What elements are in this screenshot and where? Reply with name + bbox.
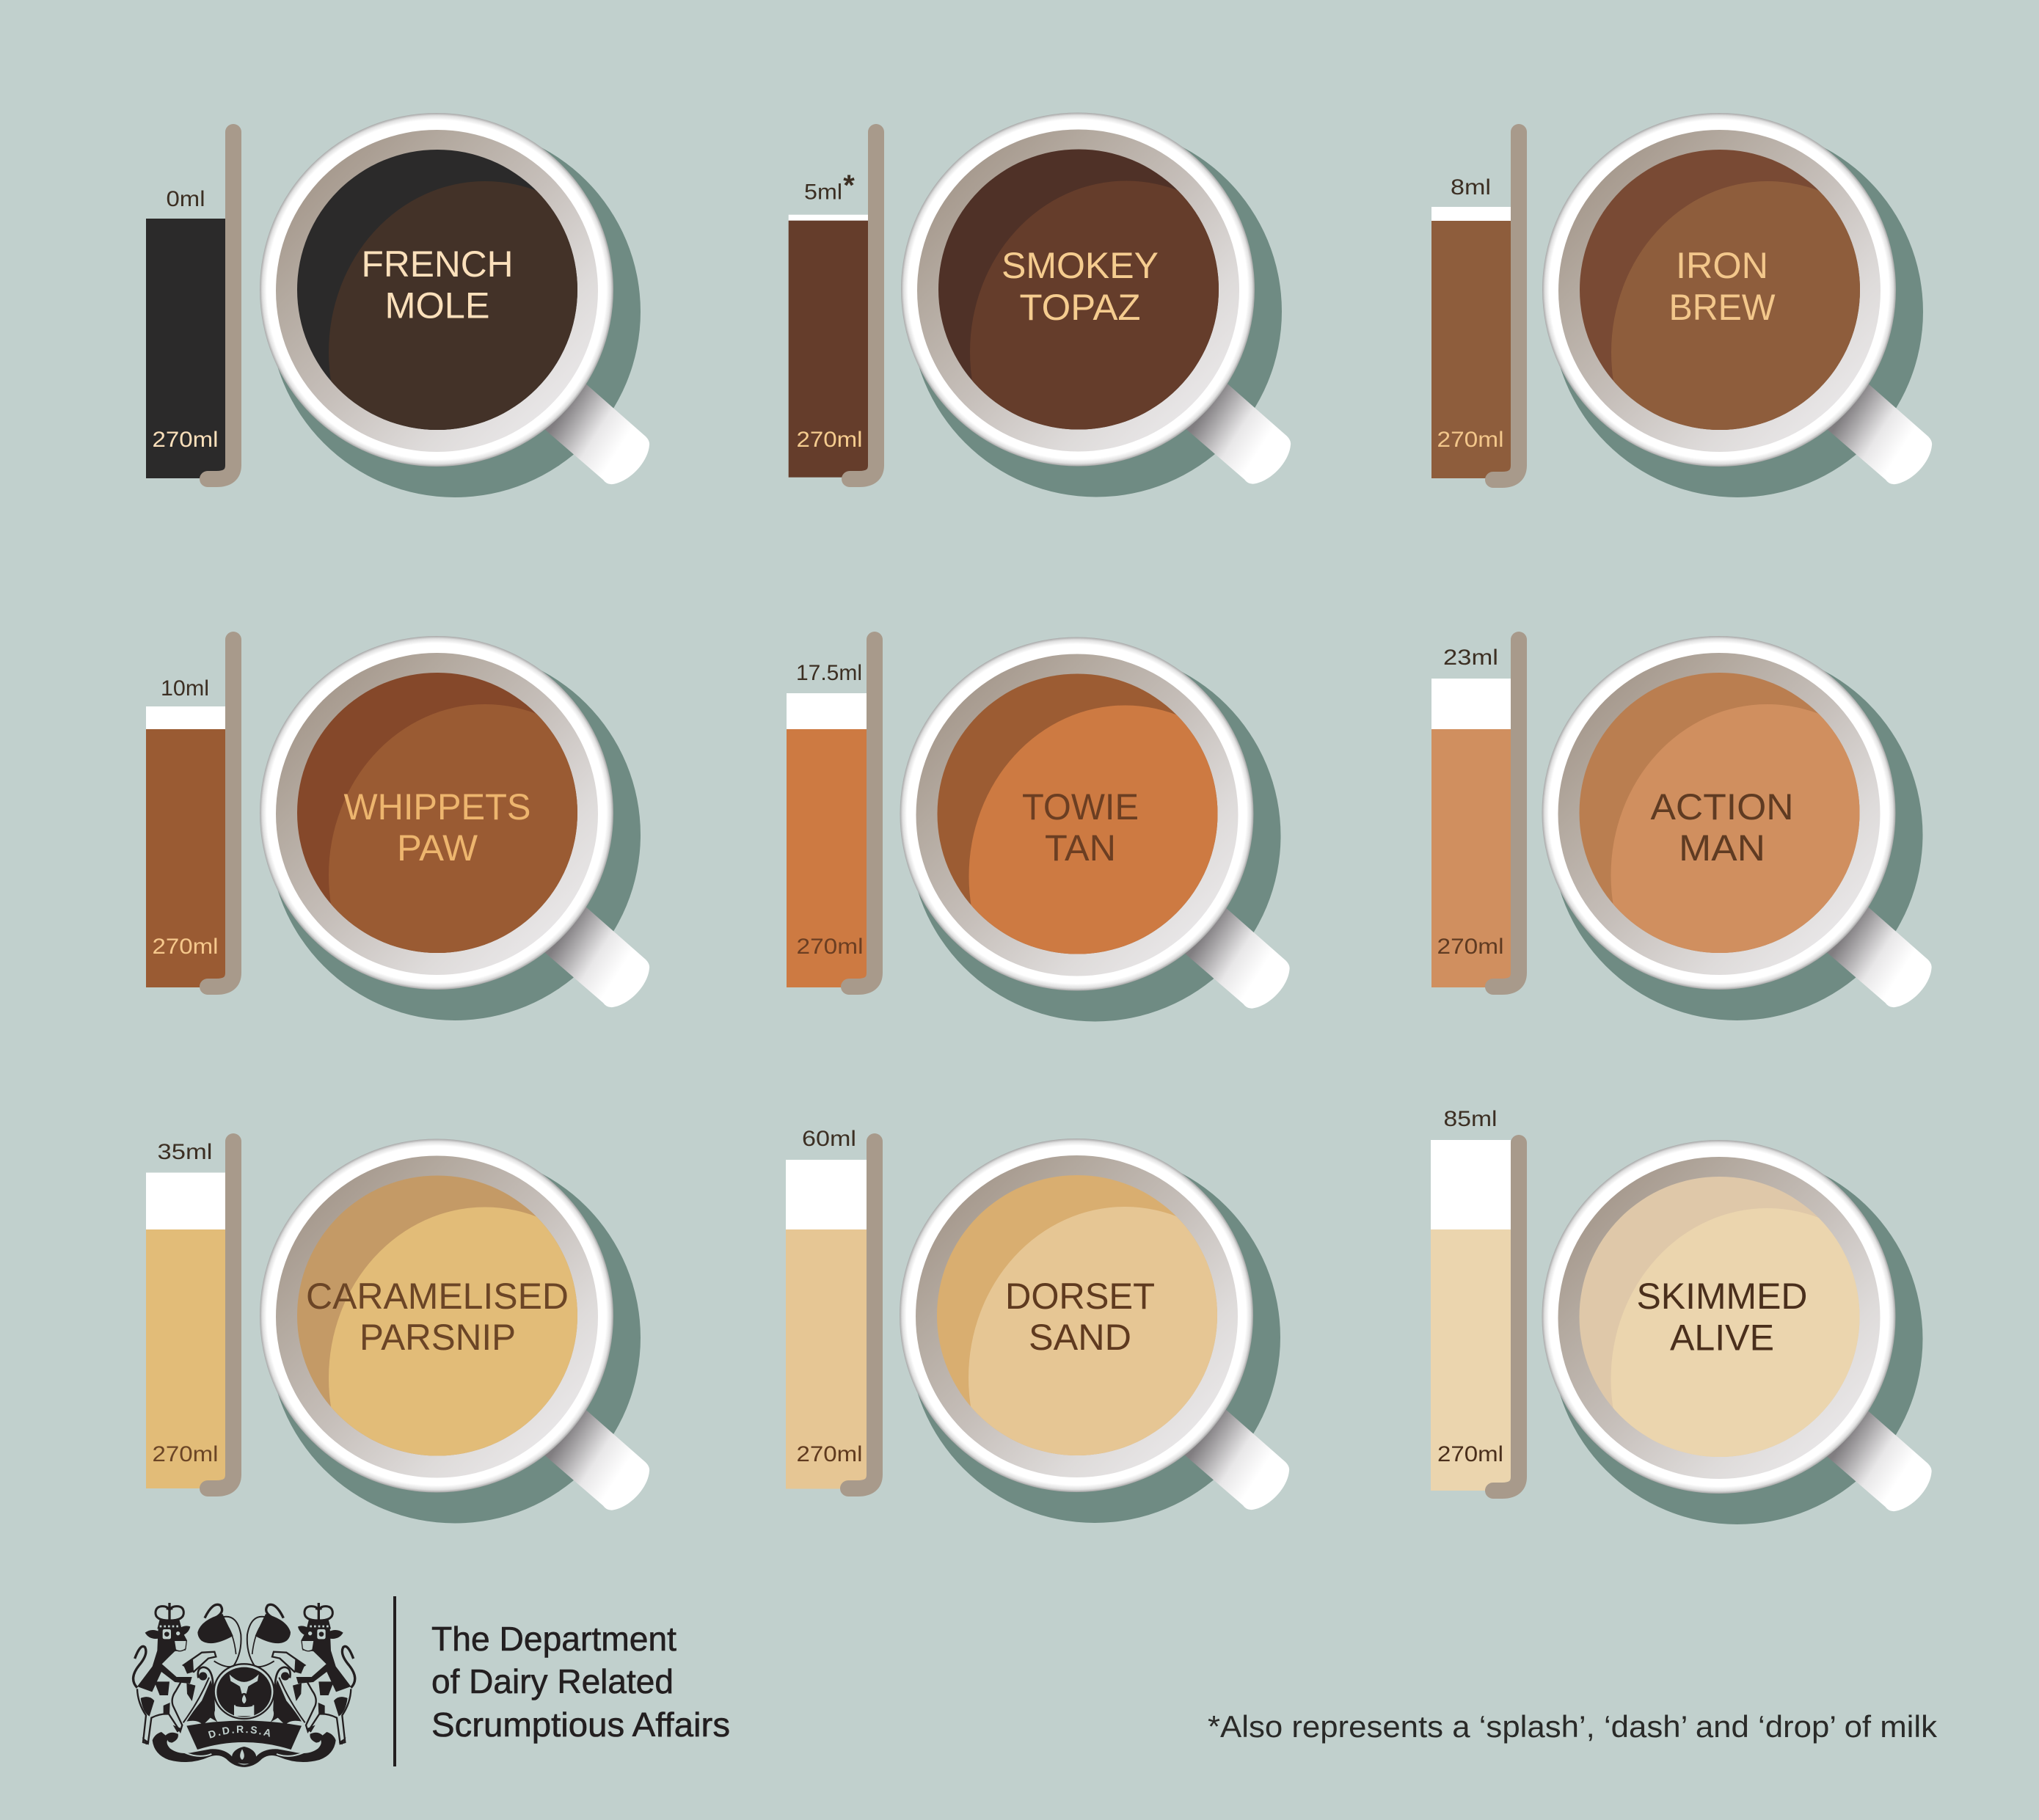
panel: Iron Brew (1431, 113, 1932, 523)
gauge: 10ml milk, 270ml coffee (146, 640, 233, 987)
cup label: CARAMELISED (306, 1276, 569, 1317)
gauge: 23ml milk, 270ml coffee (1431, 640, 1519, 987)
gauge: 8ml milk, 270ml coffee: 270ml (1437, 428, 1504, 452)
cup label (1668, 245, 1776, 328)
cup seen from above (1542, 636, 1932, 1046)
cup seen from above (1542, 113, 1932, 523)
central shield (216, 1667, 271, 1717)
cup label: TAN (1045, 827, 1116, 869)
gauge: 17.5ml milk, 270ml coffee: 270ml (797, 935, 863, 959)
panel: Dorset Sand (786, 1127, 1289, 1549)
gauge: 10ml milk, 270ml coffee: 10ml (161, 676, 209, 701)
cup seen from above (260, 1139, 649, 1549)
gauge: 8ml milk, 270ml coffee (1431, 132, 1519, 480)
logo: D.D.R.S.A crest (132, 1603, 357, 1767)
gauge: 5ml milk, 270ml coffee: 5ml (804, 180, 842, 205)
cup seen from above (900, 1139, 1289, 1549)
banner (186, 1720, 302, 1750)
gauge: 8ml milk, 270ml coffee: 8ml (1451, 175, 1491, 200)
panel: Whippets Paw (146, 636, 649, 1046)
gauge: 17.5ml milk, 270ml coffee (787, 640, 875, 987)
gauge: 60ml milk, 270ml coffee: 270ml (797, 1442, 863, 1466)
panel: Skimmed Alive (1431, 1107, 1932, 1550)
cup label: DORSET (1005, 1276, 1155, 1317)
cup label (1636, 1276, 1808, 1359)
banner text: D.D.R.S.A (208, 1725, 270, 1739)
gauge: 60ml milk, 270ml coffee: 60ml (802, 1127, 856, 1151)
cup label (1651, 786, 1793, 869)
cup label: ACTION (1651, 786, 1793, 827)
divider (393, 1596, 396, 1766)
gauge: 23ml milk, 270ml coffee: 23ml (1443, 646, 1498, 670)
cup label: TOWIE (1022, 786, 1139, 827)
footnote: *Also represents a ‘splash’, ‘dash’ and ‘drop’ of milk (1208, 1709, 1938, 1744)
gauge: 5ml milk, 270ml coffee: 270ml (797, 428, 863, 452)
gauge: 5ml milk, 270ml coffee: * (843, 169, 855, 202)
gauge: 17.5ml milk, 270ml coffee: 17.5ml (796, 661, 862, 685)
gauge: 0ml milk, 270ml coffee: 270ml (153, 428, 219, 452)
gauge: 5ml milk, 270ml coffee (789, 132, 876, 479)
cup label: WHIPPETS (343, 786, 531, 827)
cup seen from above (901, 113, 1291, 522)
cup label: SKIMMED (1636, 1276, 1808, 1317)
department name (431, 1620, 730, 1744)
cup label: PARSNIP (360, 1317, 516, 1358)
department name: Scrumptious Affairs (431, 1706, 730, 1744)
cup label: PAW (397, 827, 478, 869)
cup seen from above (260, 636, 649, 1046)
panel: Smokey Topaz (789, 113, 1291, 522)
cup label: SAND (1029, 1317, 1131, 1358)
cup label (1002, 245, 1159, 328)
gauge: 85ml milk, 270ml coffee (1431, 1107, 1519, 1491)
cup label (1022, 786, 1139, 869)
gauge: 35ml milk, 270ml coffee: 35ml (157, 1140, 213, 1164)
cup label: SMOKEY (1002, 245, 1159, 286)
gauge: 60ml milk, 270ml coffee (786, 1127, 875, 1489)
department name: of Dairy Related (431, 1662, 674, 1700)
cup label: IRON (1676, 245, 1768, 286)
cup label: MOLE (384, 285, 490, 326)
gauge: 85ml milk, 270ml coffee: 85ml (1444, 1107, 1497, 1131)
panel: Towie Tan (787, 637, 1290, 1048)
gauge: 35ml milk, 270ml coffee: 270ml (153, 1442, 219, 1466)
department name: The Department (431, 1620, 676, 1658)
gauge: 35ml milk, 270ml coffee (146, 1140, 233, 1488)
gauge: 10ml milk, 270ml coffee: 270ml (153, 935, 219, 959)
cup label: FRENCH (361, 244, 514, 285)
cup label (361, 244, 514, 326)
gauge: 23ml milk, 270ml coffee: 270ml (1437, 935, 1504, 959)
gauge: 85ml milk, 270ml coffee: 270ml (1437, 1442, 1503, 1466)
panel: Action Man (1431, 636, 1932, 1046)
gauge: 0ml milk, 270ml coffee: 0ml (166, 187, 205, 211)
cup label: ALIVE (1670, 1318, 1774, 1359)
panel: French Mole (146, 113, 649, 523)
panel: Caramelised Parsnip (146, 1139, 649, 1549)
cup label: BREW (1668, 287, 1776, 328)
cup seen from above (900, 637, 1290, 1048)
cup seen from above (1542, 1140, 1932, 1550)
cup label (343, 786, 531, 869)
cup label (306, 1276, 569, 1358)
cup seen from above (260, 113, 649, 523)
cup label: TOPAZ (1020, 287, 1140, 328)
gauge: 0ml milk, 270ml coffee (146, 132, 233, 479)
cup label: MAN (1679, 827, 1765, 869)
cup label (1005, 1276, 1155, 1358)
